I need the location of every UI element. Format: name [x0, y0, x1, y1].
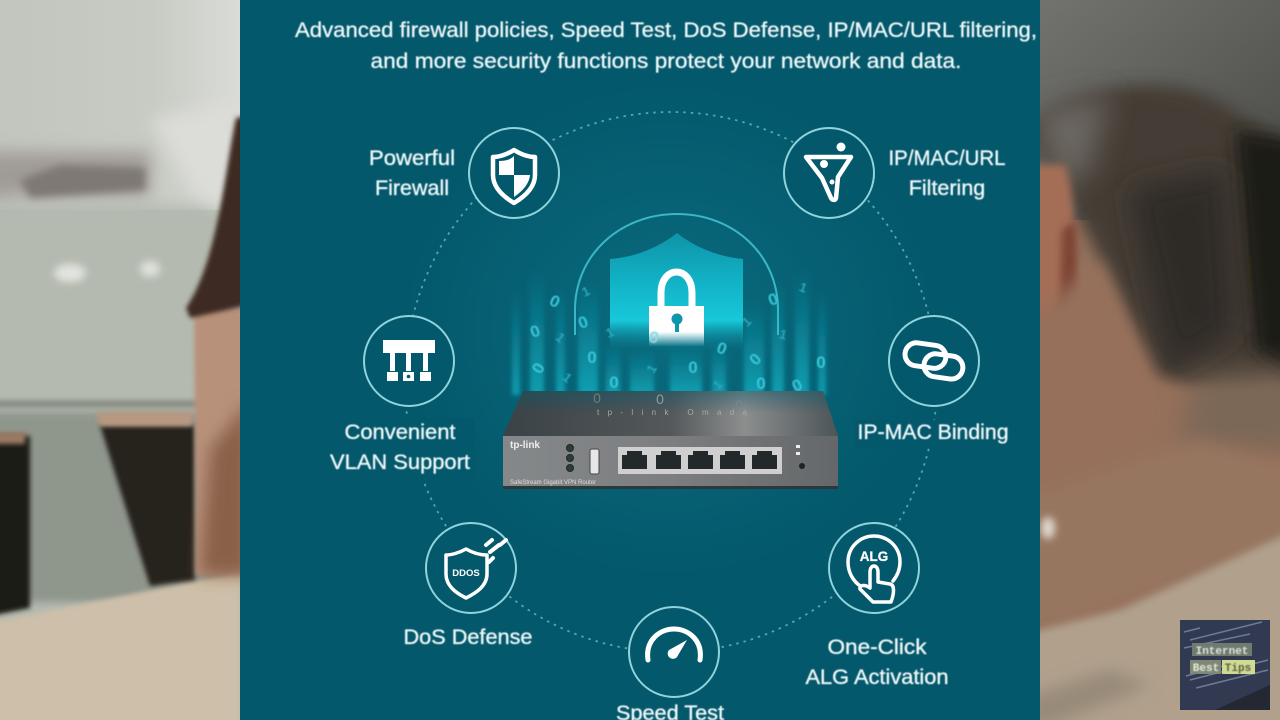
brand on top: tp-link Omada [597, 408, 748, 417]
data digits: 0 [575, 312, 591, 333]
data digits: 1 [579, 283, 592, 300]
dotted orbit ring [405, 112, 937, 652]
panel: teal feature panel [240, 0, 1040, 720]
LEDs [566, 444, 574, 472]
feature: DoS Defense [404, 523, 532, 649]
data digits: 1 [739, 314, 755, 330]
icon: ddos shield: DDOS [452, 568, 480, 579]
right blurred photo background [1040, 0, 1280, 720]
data digits on router top: 0 [593, 390, 601, 406]
feature: IP/MAC/URL Filtering [784, 128, 1006, 218]
router device: SafeStream Gigabit VPN Router [510, 480, 596, 486]
data digits: 0 [527, 321, 543, 342]
router front [503, 436, 838, 487]
icon: shield [493, 150, 535, 203]
data digits on router top [593, 390, 743, 413]
data digits [527, 279, 826, 396]
intro text [295, 18, 1037, 73]
data digits: 1 [778, 326, 789, 343]
left blurred photo background [0, 0, 240, 720]
feature: Convenient VLAN Support: VLAN Support [330, 450, 470, 474]
router device [503, 390, 838, 489]
feature: One-Click ALG Activation: One-Click [828, 635, 927, 659]
arc [575, 214, 778, 335]
padlock [649, 272, 704, 346]
feature: IP/MAC/URL Filtering: IP/MAC/URL [888, 146, 1006, 170]
data digits: 0 [528, 359, 549, 377]
feature: IP-MAC Binding: IP-MAC Binding [858, 420, 1008, 444]
brand and labels: tp-link [510, 440, 540, 451]
feature: IP/MAC/URL Filtering: Filtering [909, 176, 985, 200]
data digits: 0 [688, 358, 698, 377]
data digits: 0 [745, 349, 765, 369]
data digits: 0 [546, 291, 563, 312]
feature: One-Click ALG Activation: ALG Activation [806, 665, 948, 689]
feature: Convenient VLAN Support [330, 316, 470, 474]
watermark logo: Internet Best Tips: Best [1193, 663, 1219, 675]
shield [610, 233, 743, 350]
data digits: 0 [756, 374, 766, 393]
feature: Convenient VLAN Support: Convenient [344, 420, 456, 444]
watermark logo: Internet Best Tips: Internet [1196, 646, 1248, 658]
icon: VLAN [383, 340, 435, 381]
data digits: 0 [587, 348, 597, 367]
data digits: 1 [603, 324, 616, 341]
data digits: 0 [765, 289, 781, 310]
data digits: 0 [816, 353, 826, 372]
feature: Powerful Firewall: Powerful [369, 146, 455, 170]
feature: Speed Test [616, 607, 724, 720]
data digits: 1 [710, 377, 726, 393]
data digits: 1 [553, 330, 568, 346]
feature: DoS Defense: DoS Defense [404, 625, 532, 649]
feature: IP-MAC Binding [858, 316, 1008, 444]
data digits: 1 [560, 370, 575, 386]
intro text: Advanced firewall policies, Speed Test, DoS Defense, IP/MAC/URL filtering, [295, 18, 1037, 42]
icon: ALG hand: ALG [860, 549, 888, 564]
reset and status [799, 463, 805, 469]
central shield and data graphic [512, 214, 826, 396]
data digits: 0 [648, 327, 660, 348]
watermark logo: Internet Best Tips: Tips [1225, 663, 1251, 675]
data digits: 1 [797, 279, 809, 296]
data digits: 1 [643, 362, 660, 376]
feature: Powerful Firewall: Firewall [375, 176, 449, 200]
feature: One-Click ALG Activation [806, 523, 948, 689]
watermark logo: Internet Best Tips [1180, 620, 1270, 710]
data digits: 0 [789, 375, 806, 396]
icon: funnel [806, 142, 851, 200]
data digits on router top: 0 [735, 397, 743, 413]
icon: chain links [904, 341, 964, 381]
data digits: 0 [609, 373, 619, 392]
USB port [590, 449, 599, 474]
light beams [512, 270, 826, 395]
icon: gauge [648, 629, 700, 660]
router top [503, 391, 838, 436]
icon: ALG hand [848, 536, 900, 602]
intro text: and more security functions protect your network and data. [370, 49, 962, 73]
data digits on router top: 0 [656, 391, 664, 407]
feature: Powerful Firewall [369, 128, 559, 218]
data digits: 0 [714, 338, 730, 359]
ethernet ports [618, 447, 782, 474]
